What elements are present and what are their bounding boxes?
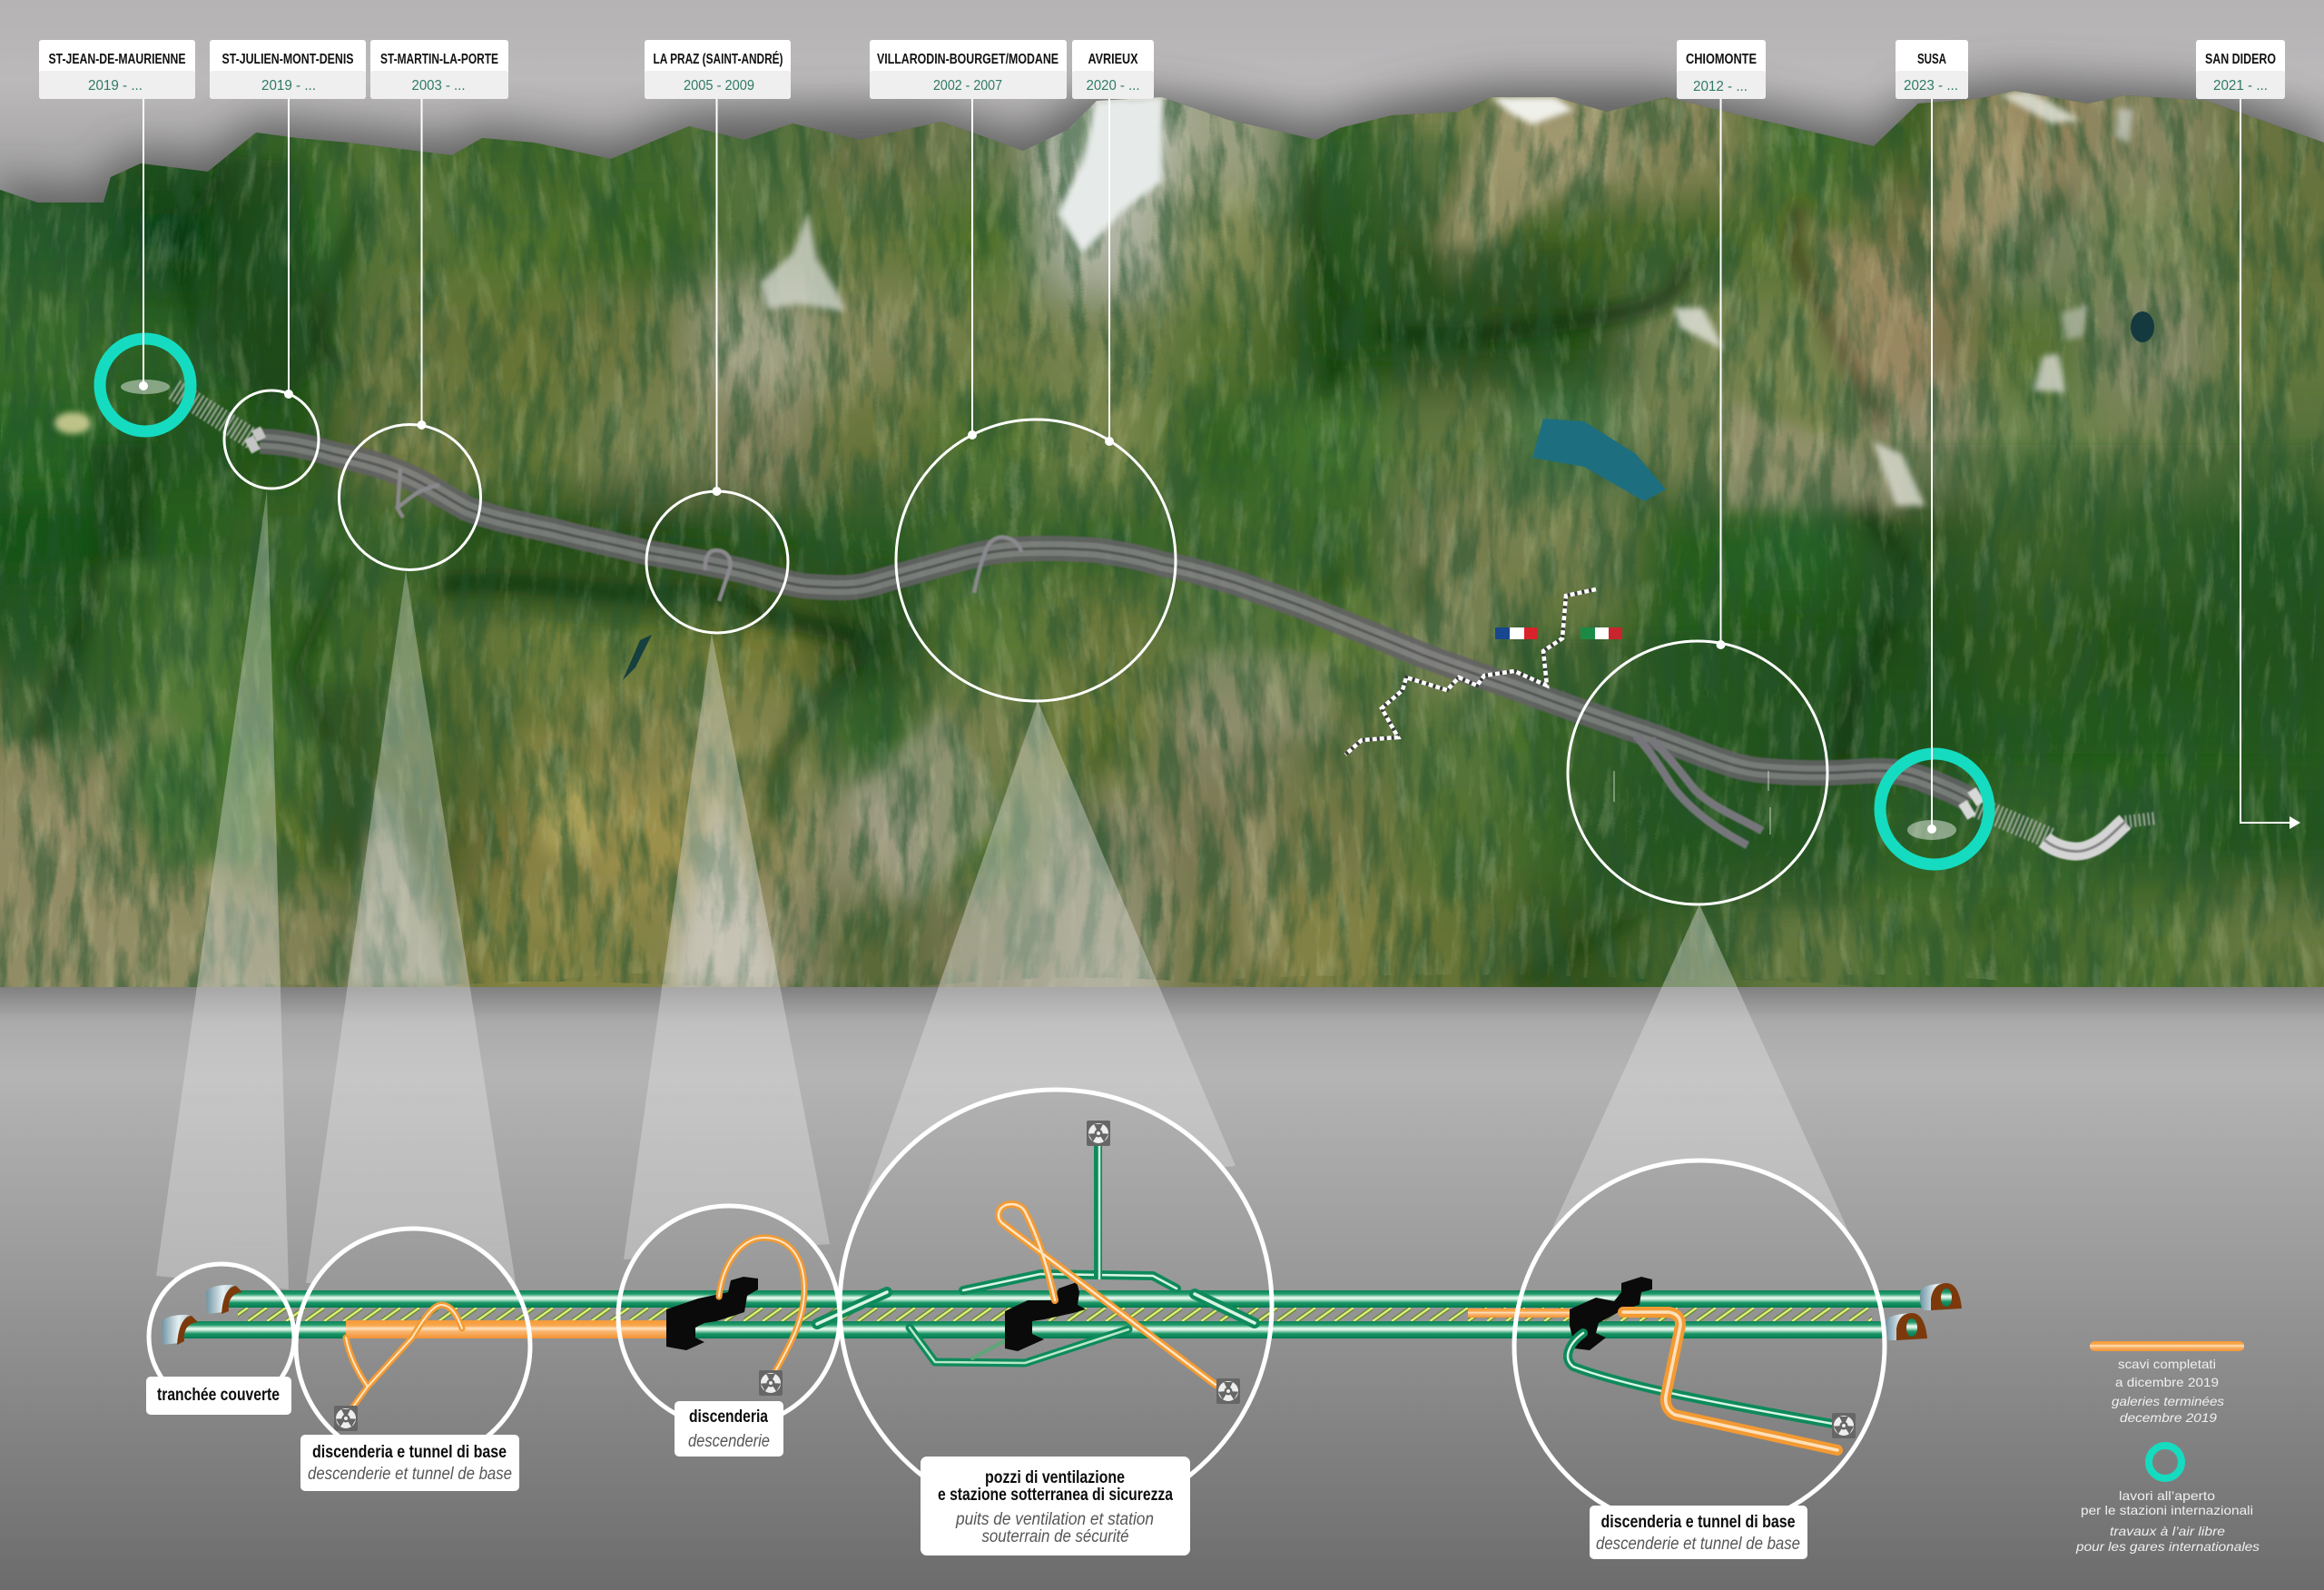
lake	[1532, 419, 1666, 501]
caption: discenderia e tunnel di base (east): descenderie et tunnel de base	[1596, 1535, 1800, 1554]
station: Modane	[1005, 1282, 1086, 1351]
legend text: open-air works	[2075, 1488, 2260, 1554]
lens ring: St-Martin-la-Porte	[296, 1229, 530, 1463]
arrow: San Didero	[2240, 99, 2300, 829]
orange descent Modane	[999, 1204, 1216, 1385]
portal caps west	[249, 429, 261, 451]
lake west	[623, 635, 652, 680]
caption: discenderia e tunnel di base (west): discenderia e tunnel di base	[312, 1443, 507, 1462]
label: Avrieux: 2020 - ...	[1086, 78, 1140, 94]
terrain ridges and tan slopes	[0, 95, 2324, 987]
hatched western approach	[174, 390, 256, 441]
fan: shaft north	[1087, 1121, 1110, 1146]
schematic of the twin tunnel tubes	[162, 1121, 1962, 1450]
map circle: St-Julien-Mont-Denis	[224, 390, 319, 489]
small lake	[2131, 311, 2154, 342]
label: St-Martin-la-Porte: ST-MARTIN-LA-PORTE	[380, 52, 498, 67]
fan: shaft south	[1216, 1378, 1240, 1404]
label: Villarodin-Bourget/Modane	[870, 40, 1067, 99]
excavated section of south tube	[346, 1320, 667, 1338]
caption: discenderia e tunnel di base (east): discenderia e tunnel di base	[1601, 1513, 1796, 1532]
east hatched end	[2125, 818, 2155, 822]
orange descent St-Martin	[346, 1305, 462, 1417]
caption: discenderia	[675, 1401, 783, 1457]
tube crossings	[817, 1292, 1255, 1363]
label: Chiomonte	[1677, 40, 1766, 99]
lens ring: Modane	[840, 1090, 1272, 1522]
label: St-Martin-la-Porte	[370, 40, 508, 99]
label: San Didero: SAN DIDERO	[2205, 52, 2276, 67]
St-Martin branch	[396, 469, 439, 518]
zoom beam: Chiomonte	[1551, 904, 1850, 1235]
lens ring: Chiomonte	[1514, 1160, 1885, 1531]
legend text: excavated: scavi completati	[2118, 1357, 2216, 1371]
south tube	[184, 1321, 1886, 1338]
Modane branch	[974, 538, 1021, 593]
label: St-Jean-de-Maurienne	[39, 40, 195, 99]
main tunnel	[260, 441, 1970, 800]
safety station bypass, north	[963, 1274, 1177, 1290]
label: Villarodin-Bourget/Modane: VILLARODIN-BOURGET/MODANE	[877, 52, 1059, 67]
fan: La Praz	[759, 1370, 783, 1396]
leader lines	[139, 99, 2300, 834]
east portal cap	[1963, 790, 1981, 817]
label: Chiomonte: 2012 - ...	[1693, 79, 1748, 94]
map circle: Villarodin-Bourget/Modane	[896, 420, 1176, 701]
lens backgrounds	[149, 1090, 1885, 1531]
label: La Praz: 2005 - 2009	[684, 78, 754, 94]
streak texture dark	[0, 82, 2324, 987]
map circle: Chiomonte	[1568, 641, 1827, 904]
legend swatch: open-air works	[2149, 1446, 2181, 1478]
streak texture light	[0, 82, 2324, 987]
label: Villarodin-Bourget/Modane: 2002 - 2007	[933, 78, 1002, 94]
snow fields	[54, 91, 2133, 506]
international station: Susa	[1880, 754, 1989, 864]
legend text: excavated: galeries terminées	[2112, 1394, 2224, 1408]
small white site marks	[1614, 771, 1770, 835]
portals east	[1886, 1283, 1962, 1340]
label: St-Julien-Mont-Denis: ST-JULIEN-MONT-DENIS	[222, 52, 354, 67]
fan: St-Martin	[334, 1406, 358, 1431]
label: St-Martin-la-Porte: 2003 - ...	[412, 78, 465, 94]
legend text: excavated	[2112, 1357, 2224, 1425]
zoom beam: tranchée couverte	[156, 490, 289, 1289]
legend text: open-air works: lavori all’aperto	[2119, 1488, 2215, 1503]
caption: pozzi di ventilazione: e stazione sotterranea di sicurezza	[938, 1486, 1173, 1505]
label: La Praz: LA PRAZ (SAINT-ANDRÉ)	[654, 50, 783, 67]
Chiomonte branches	[1636, 736, 1748, 845]
east loop	[2044, 822, 2125, 852]
lens ring: tranchée couverte	[149, 1264, 294, 1409]
label: St-Julien-Mont-Denis: 2019 - ...	[261, 78, 316, 94]
north tube	[227, 1290, 1923, 1308]
fan: Chiomonte	[1832, 1413, 1856, 1438]
label: St-Julien-Mont-Denis	[210, 40, 366, 99]
green descent Chiomonte	[1568, 1333, 1833, 1424]
caption: pozzi di ventilazione: puits de ventilation et station	[955, 1510, 1154, 1529]
caption: discenderia: descenderie	[688, 1432, 770, 1451]
legend swatch: excavated	[2090, 1341, 2244, 1351]
legend text: open-air works: travaux à l’air libre	[2110, 1524, 2225, 1538]
caption: tranchée couverte	[146, 1377, 291, 1415]
orange descent Chiomonte	[1623, 1312, 1837, 1450]
label: Susa: SUSA	[1917, 52, 1946, 67]
label: Chiomonte: CHIOMONTE	[1686, 52, 1757, 67]
French flag	[1495, 627, 1538, 639]
legend text: excavated: a dicembre 2019	[2115, 1375, 2219, 1389]
zoom beam: La Praz	[624, 633, 830, 1259]
legend	[2075, 1341, 2260, 1554]
caption: pozzi di ventilazione	[921, 1457, 1190, 1555]
zoom beam: St-Martin-la-Porte	[306, 570, 517, 1289]
label: San Didero	[2196, 40, 2285, 99]
zoom beam: Villarodin-Bourget/Modane	[864, 701, 1236, 1201]
state border	[1345, 589, 1596, 755]
terrain colour field	[0, 91, 2324, 987]
caption: discenderia: discenderia	[689, 1407, 768, 1427]
Italian flag	[1581, 627, 1622, 639]
hatched eastern approach	[1977, 807, 2052, 839]
label: San Didero: 2021 - ...	[2213, 78, 2268, 94]
legend text: open-air works: per le stazioni internazionali	[2081, 1503, 2253, 1517]
label: Susa: 2023 - ...	[1904, 78, 1958, 94]
label: Avrieux	[1072, 40, 1154, 99]
legend text: open-air works: pour les gares internationales	[2075, 1539, 2260, 1554]
label: Avrieux: AVRIEUX	[1088, 52, 1138, 67]
station: La Praz	[666, 1277, 758, 1350]
ventilation shaft	[1098, 1144, 1099, 1279]
portals west	[162, 1285, 242, 1345]
label: Susa	[1896, 40, 1968, 99]
caption: pozzi di ventilazione: souterrain de sécurité	[982, 1527, 1129, 1546]
label: St-Jean-de-Maurienne: 2019 - ...	[88, 78, 143, 94]
caption: tranchée couverte: tranchée couverte	[157, 1386, 280, 1405]
international station: St-Jean-de-Maurienne	[100, 339, 191, 431]
caption: discenderia e tunnel di base (east)	[1590, 1506, 1807, 1559]
orange descent La Praz	[719, 1238, 804, 1371]
panel: relief map of the Alps	[0, 91, 2324, 987]
lens ring: La Praz	[618, 1206, 840, 1427]
label: La Praz	[645, 40, 791, 99]
legend text: excavated: decembre 2019	[2120, 1410, 2217, 1425]
map circle: La Praz	[646, 491, 788, 633]
caption: discenderia e tunnel di base (west): descenderie et tunnel de base	[308, 1465, 512, 1484]
La Praz hook	[705, 550, 730, 601]
excavated section east	[1468, 1309, 1570, 1318]
skyline shadow	[0, 78, 2324, 272]
caption: discenderia e tunnel di base (west)	[300, 1435, 519, 1491]
cross-passage hatching	[238, 1306, 1872, 1322]
label: St-Jean-de-Maurienne: ST-JEAN-DE-MAURIENNE	[49, 52, 186, 67]
station: Chiomonte	[1570, 1277, 1652, 1350]
caption: pozzi di ventilazione: pozzi di ventilazione	[985, 1468, 1125, 1487]
tunnel route on the map	[174, 390, 2155, 852]
map circle: St-Martin-la-Porte	[340, 425, 481, 570]
